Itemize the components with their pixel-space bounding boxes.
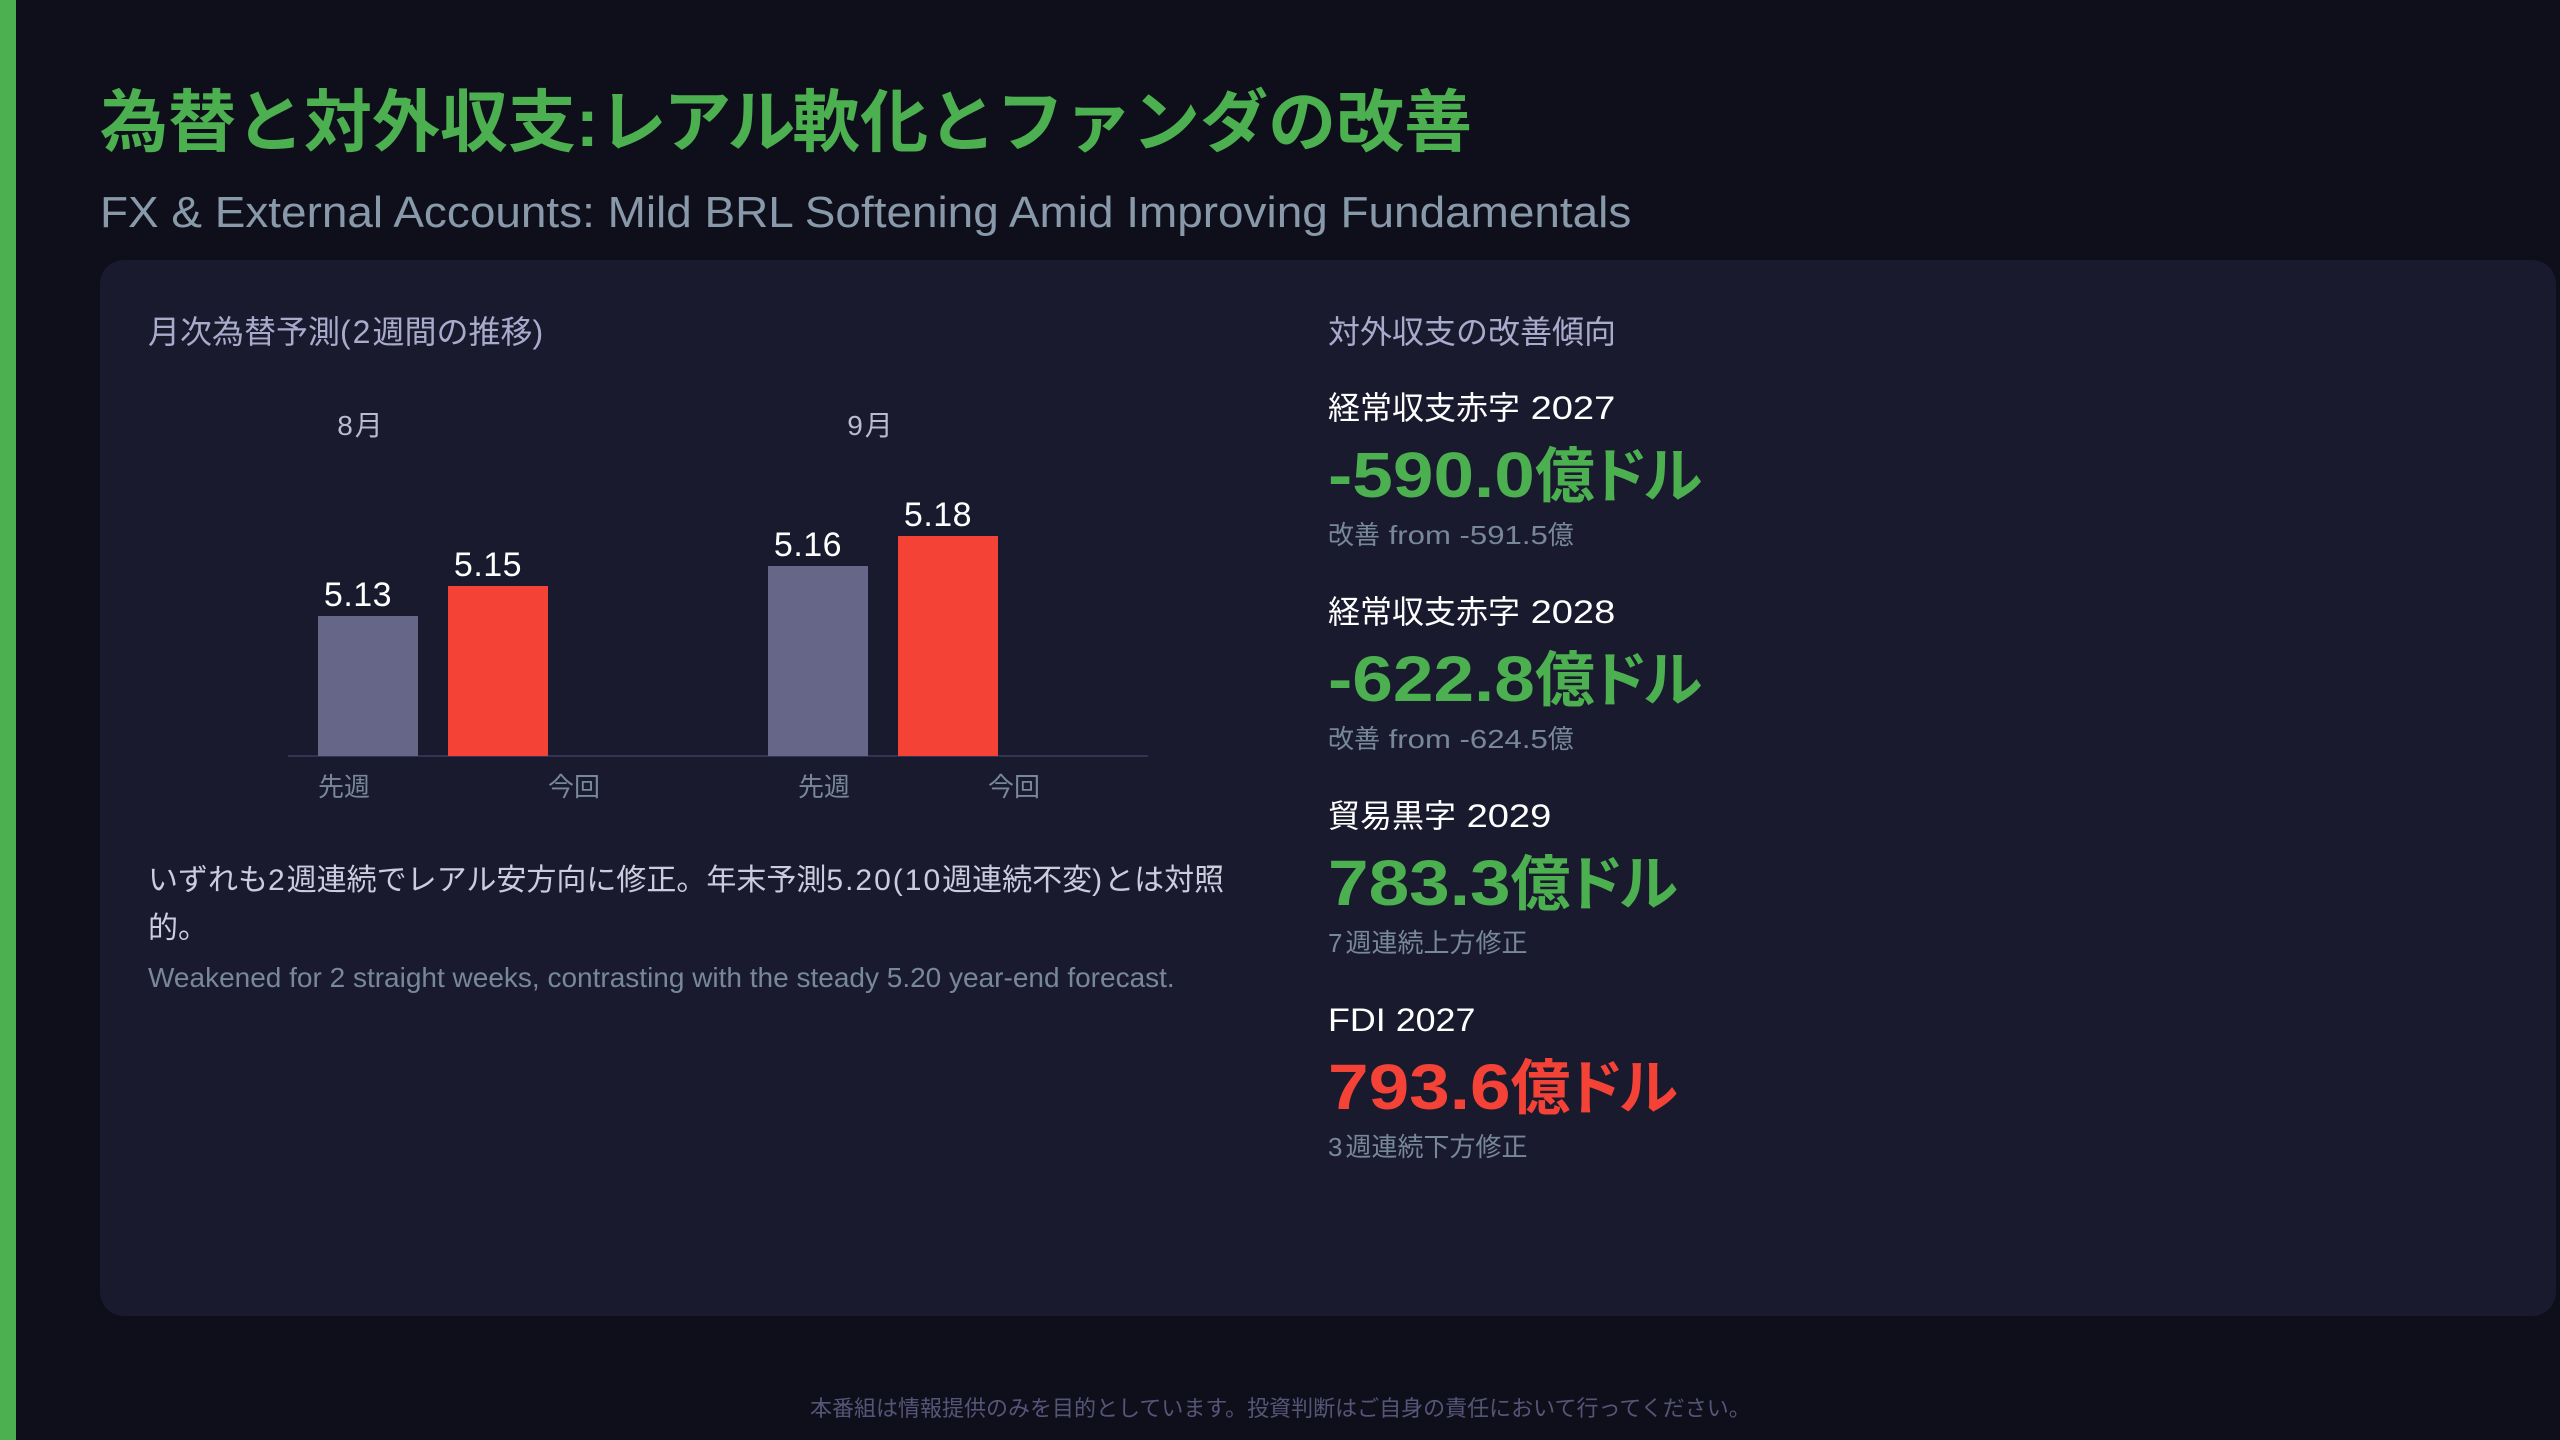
- heading: monthly FX forecast: 月次為替予測(2週間の推移): [148, 314, 545, 350]
- label: [1328, 594, 1615, 630]
- month label: September: 9月: [847, 410, 895, 441]
- metric: trade surplus 2029: [1328, 798, 1676, 958]
- bar chart: monthly FX forecast: [288, 410, 1148, 802]
- value: -590.0: [1328, 439, 1535, 511]
- label: 経常収支赤字: [1328, 390, 1520, 426]
- axis label: last week: 先週: [318, 772, 370, 802]
- value: 億ドル: [1511, 1055, 1673, 1122]
- label: 経常収支赤字: [1328, 594, 1520, 630]
- commentary: Japanese: いずれも2週連続でレアル安方向に修正。年末予測5.20(10週連続不変)とは対照: [148, 864, 1224, 897]
- heading: external accounts: 対外収支の改善傾向: [1328, 314, 1616, 350]
- note: 改善 億: [1328, 520, 1574, 550]
- value: [1328, 439, 1701, 511]
- value: [1328, 643, 1701, 715]
- axis label: last week: 先週: [798, 772, 850, 802]
- axis label: this time: 今回: [988, 772, 1040, 802]
- month label: August: 8月: [337, 410, 385, 441]
- value: [1328, 1051, 1677, 1123]
- value: 億ドル: [1511, 851, 1673, 918]
- metric: current account 2028: [1328, 594, 1701, 754]
- axis label: this time: 今回: [548, 772, 600, 802]
- label: 貿易黒字: [1328, 798, 1456, 834]
- value: 793.6: [1328, 1051, 1511, 1123]
- commentary: Japanese: [148, 864, 1224, 945]
- value: 5.18: 5.18: [904, 496, 972, 534]
- note: 改善 億: [1328, 724, 1574, 754]
- label: 2027: [1531, 390, 1615, 426]
- label: 2028: [1531, 594, 1615, 630]
- panel: main card: [100, 260, 2556, 1316]
- label: [1328, 798, 1551, 834]
- group: September: [768, 410, 1040, 802]
- group: August: [318, 410, 600, 802]
- commentary: English: Weakened for 2 straight weeks, contrasting with the steady 5.20 year-end forecast.: [148, 962, 1175, 993]
- footer disclaimer: 本番組は情報提供のみを目的としています。投資判断はご自身の責任において行ってください。: [810, 1396, 1751, 1421]
- subtitle: FX & External Accounts: Mild BRL Softening Amid Improving Fundamentals: [100, 188, 1631, 237]
- note: 7週連続上方修正: [1328, 928, 1527, 958]
- metric: current account 2027: [1328, 390, 1701, 550]
- note: 3週連続下方修正: [1328, 1132, 1527, 1162]
- metric: FDI 2027: [1328, 1002, 1677, 1162]
- commentary: Japanese: 的。: [148, 912, 208, 945]
- accent bar: [0, 0, 16, 1440]
- label: 2029: [1467, 798, 1551, 834]
- bar: August last week: [318, 616, 418, 756]
- bar: August this time: [448, 586, 548, 756]
- value: 億ドル: [1535, 647, 1697, 714]
- title: 為替と対外収支:レアル軟化とファンダの改善: [100, 85, 1472, 161]
- value: 5.15: 5.15: [454, 546, 522, 584]
- note: from -624.5: [1389, 724, 1548, 754]
- axis line: [288, 755, 1148, 757]
- label: FDI 2027: [1328, 1002, 1475, 1038]
- value: 5.16: 5.16: [774, 526, 842, 564]
- bar: September last week: [768, 566, 868, 756]
- label: [1328, 390, 1615, 426]
- bar: September this time: [898, 536, 998, 756]
- value: -622.8: [1328, 643, 1535, 715]
- note: from -591.5: [1389, 520, 1548, 550]
- value: 5.13: 5.13: [324, 576, 392, 614]
- value: 億ドル: [1535, 443, 1697, 510]
- value: 783.3: [1328, 847, 1511, 919]
- value: [1328, 847, 1676, 919]
